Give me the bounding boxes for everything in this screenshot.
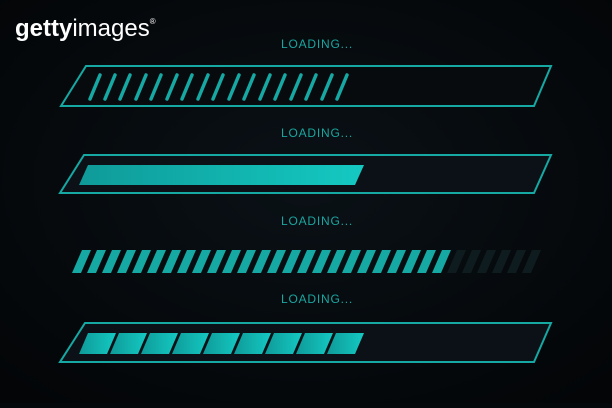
- label 2: LOADING...: [281, 126, 353, 140]
- label 4: LOADING...: [281, 292, 353, 306]
- label 3: LOADING...: [281, 214, 353, 228]
- bar 4: segmented: [60, 323, 551, 362]
- logo: gettyimages: [15, 15, 150, 42]
- bar 2: solid fill: [60, 155, 551, 193]
- bar 1: striped: [61, 66, 551, 106]
- logo: ®: [150, 17, 156, 26]
- label 1: LOADING...: [281, 37, 353, 51]
- bar 3: thick stripes: [72, 250, 541, 273]
